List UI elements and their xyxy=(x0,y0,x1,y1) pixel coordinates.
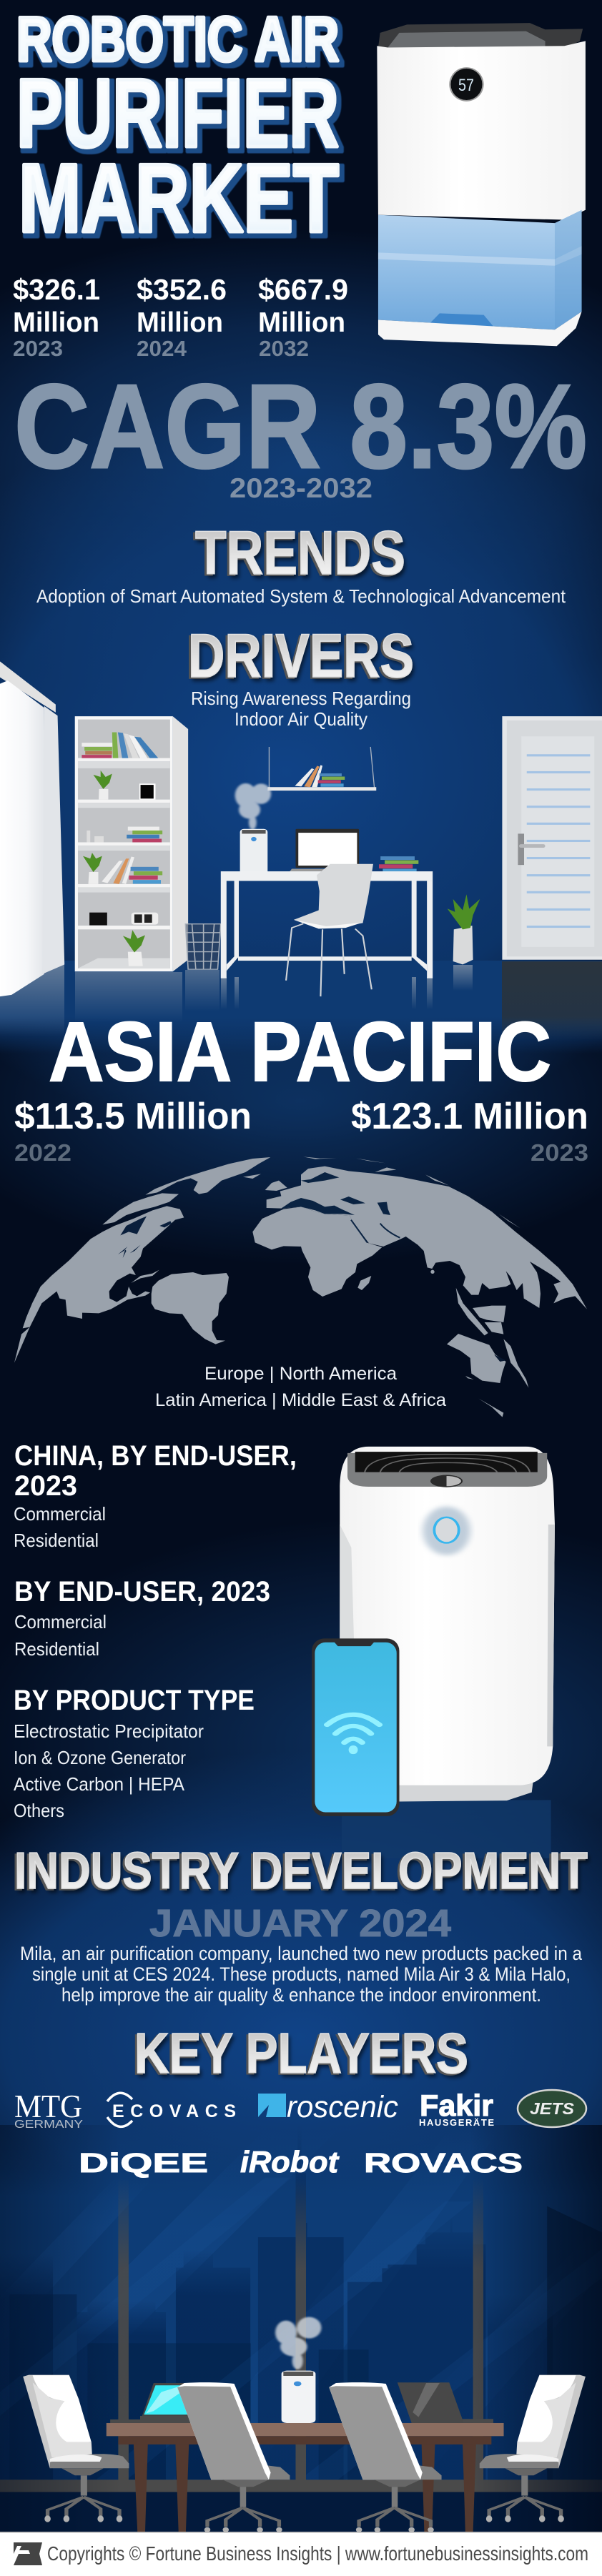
room scene xyxy=(0,661,602,996)
drivers heading: DRIVERS xyxy=(188,622,414,690)
region values xyxy=(14,1096,588,1166)
other regions list xyxy=(155,1364,446,1410)
chair back right xyxy=(480,2375,586,2522)
front chair one xyxy=(177,2382,290,2532)
skyline stripes xyxy=(0,2130,602,2480)
panel: by end-user: BY END-USER, 2023 xyxy=(14,1576,270,1607)
market values xyxy=(13,273,348,361)
panel: by product type: Electrostatic Precipitator xyxy=(14,1720,204,1742)
value 2023: $326.1 xyxy=(13,273,100,306)
logo: Proscenic: roscenic xyxy=(287,2090,398,2124)
scene: office with skyline xyxy=(0,2125,602,2532)
books on desk xyxy=(379,856,418,872)
logo: Fakir: Fakir xyxy=(420,2089,493,2122)
trends text: Adoption of Smart Automated System & Technological Advancement xyxy=(36,585,566,607)
key players heading: KEY PLAYERS xyxy=(134,2021,468,2085)
center purifier with vapour xyxy=(275,2317,321,2423)
bookshelf xyxy=(75,716,188,971)
value 2024: Million xyxy=(137,307,223,338)
reflective floor xyxy=(0,961,602,1054)
drivers text: Rising Awareness Regarding xyxy=(191,688,411,709)
panel: by product type: Ion & Ozone Generator xyxy=(14,1747,186,1768)
region values: 2023 xyxy=(531,1139,588,1166)
value 2032 xyxy=(258,273,348,361)
panel: China by end-user xyxy=(14,1440,297,1551)
wall shelf with books xyxy=(267,747,376,791)
panel: by end-user: Residential xyxy=(14,1638,99,1660)
map: Europe, Africa, Asia, Oceania xyxy=(252,1156,587,1417)
chair xyxy=(286,864,373,996)
phone with wifi icon xyxy=(312,1638,399,1816)
logo: Fakir: HAUSGERÄTE xyxy=(419,2117,494,2128)
logo: MTG Germany: MTG xyxy=(14,2088,82,2124)
panel: by end-user: Commercial xyxy=(14,1611,107,1633)
title xyxy=(16,4,339,252)
other regions list: Europe | North America xyxy=(204,1364,397,1384)
door xyxy=(502,716,602,960)
curtain xyxy=(0,661,64,996)
scene edge shading xyxy=(0,2125,602,2532)
left laptop xyxy=(110,2383,196,2423)
logo: iRobot: iRobot xyxy=(240,2145,340,2179)
panel: China by end-user: Residential xyxy=(14,1530,99,1551)
region values: 2022 xyxy=(14,1139,71,1166)
CAGR: 2023-2032 xyxy=(230,473,372,504)
value 2023: Million xyxy=(13,307,99,338)
desk xyxy=(221,871,433,979)
panel: by product type xyxy=(14,1685,255,1821)
logo: MTG Germany: GERMANY xyxy=(14,2119,83,2131)
shelf books xyxy=(82,732,158,758)
value 2024: $352.6 xyxy=(137,273,227,306)
value 2024 xyxy=(137,273,227,361)
other regions list: Latin America | Middle East & Africa xyxy=(155,1390,446,1410)
logo: Rovacs: ROVACS xyxy=(364,2149,523,2179)
date: JANUARY 2024 xyxy=(149,1902,451,1945)
buildings xyxy=(0,2125,553,2480)
drivers text xyxy=(191,688,411,730)
region values: $113.5 Million xyxy=(14,1096,252,1137)
title: MARKET xyxy=(19,144,339,252)
window frames xyxy=(118,2178,483,2480)
development text: help improve the air quality & enhance the indoor environment. xyxy=(61,1984,541,2006)
laptop xyxy=(288,829,359,873)
panel: China by end-user: 2023 xyxy=(14,1470,77,1502)
panel: China by end-user: CHINA, BY END-USER, xyxy=(14,1440,297,1472)
right laptop xyxy=(398,2382,493,2423)
shelf objects xyxy=(83,771,162,966)
chair back left xyxy=(23,2375,129,2522)
development text xyxy=(20,1943,583,2006)
icon: wifi xyxy=(327,1715,380,1753)
map: Americas xyxy=(14,1157,287,1363)
panel: by product type: Others xyxy=(14,1800,64,1821)
product image: dehumidifier style purifier xyxy=(377,23,586,346)
panel: by end-user xyxy=(14,1576,270,1660)
small purifier and vapour xyxy=(235,783,271,875)
value 2032: Million xyxy=(258,307,345,338)
product image: dehumidifier style purifier: 57 xyxy=(458,76,474,95)
drivers text: Indoor Air Quality xyxy=(235,708,367,730)
world map xyxy=(14,1156,587,1417)
meeting table xyxy=(107,2423,504,2532)
large air purifier xyxy=(340,1447,555,1858)
floor plant xyxy=(448,894,480,964)
value 2032: 2032 xyxy=(259,336,309,361)
region heading: ASIA PACIFIC xyxy=(49,1005,551,1099)
value 2032: $667.9 xyxy=(258,273,348,306)
icon: Fortune Business Insights logo xyxy=(14,2542,42,2565)
waste basket xyxy=(185,924,221,969)
logo: Jets xyxy=(518,2090,586,2127)
panel: China by end-user: Commercial xyxy=(14,1503,106,1525)
front chair two xyxy=(329,2382,442,2532)
panel: by product type: BY PRODUCT TYPE xyxy=(14,1685,255,1716)
value 2023: 2023 xyxy=(13,336,63,361)
panel: by product type: Active Carbon | HEPA xyxy=(14,1773,185,1795)
title: PURIFIER xyxy=(16,59,339,167)
footer xyxy=(0,2532,602,2576)
region values: $123.1 Million xyxy=(351,1096,588,1137)
logo: Jets: JETS xyxy=(530,2099,575,2118)
value 2024: 2024 xyxy=(137,336,187,361)
logo: Ecovacs: ECOVACS xyxy=(112,2101,236,2121)
logo: Diqee: DiQEE xyxy=(79,2149,208,2179)
value 2023 xyxy=(13,273,100,361)
title: ROBOTIC AIR xyxy=(16,4,339,74)
logo: Ecovacs xyxy=(107,2093,236,2126)
diagonal light bands xyxy=(0,2178,602,2480)
trends heading: TRENDS xyxy=(195,519,405,588)
